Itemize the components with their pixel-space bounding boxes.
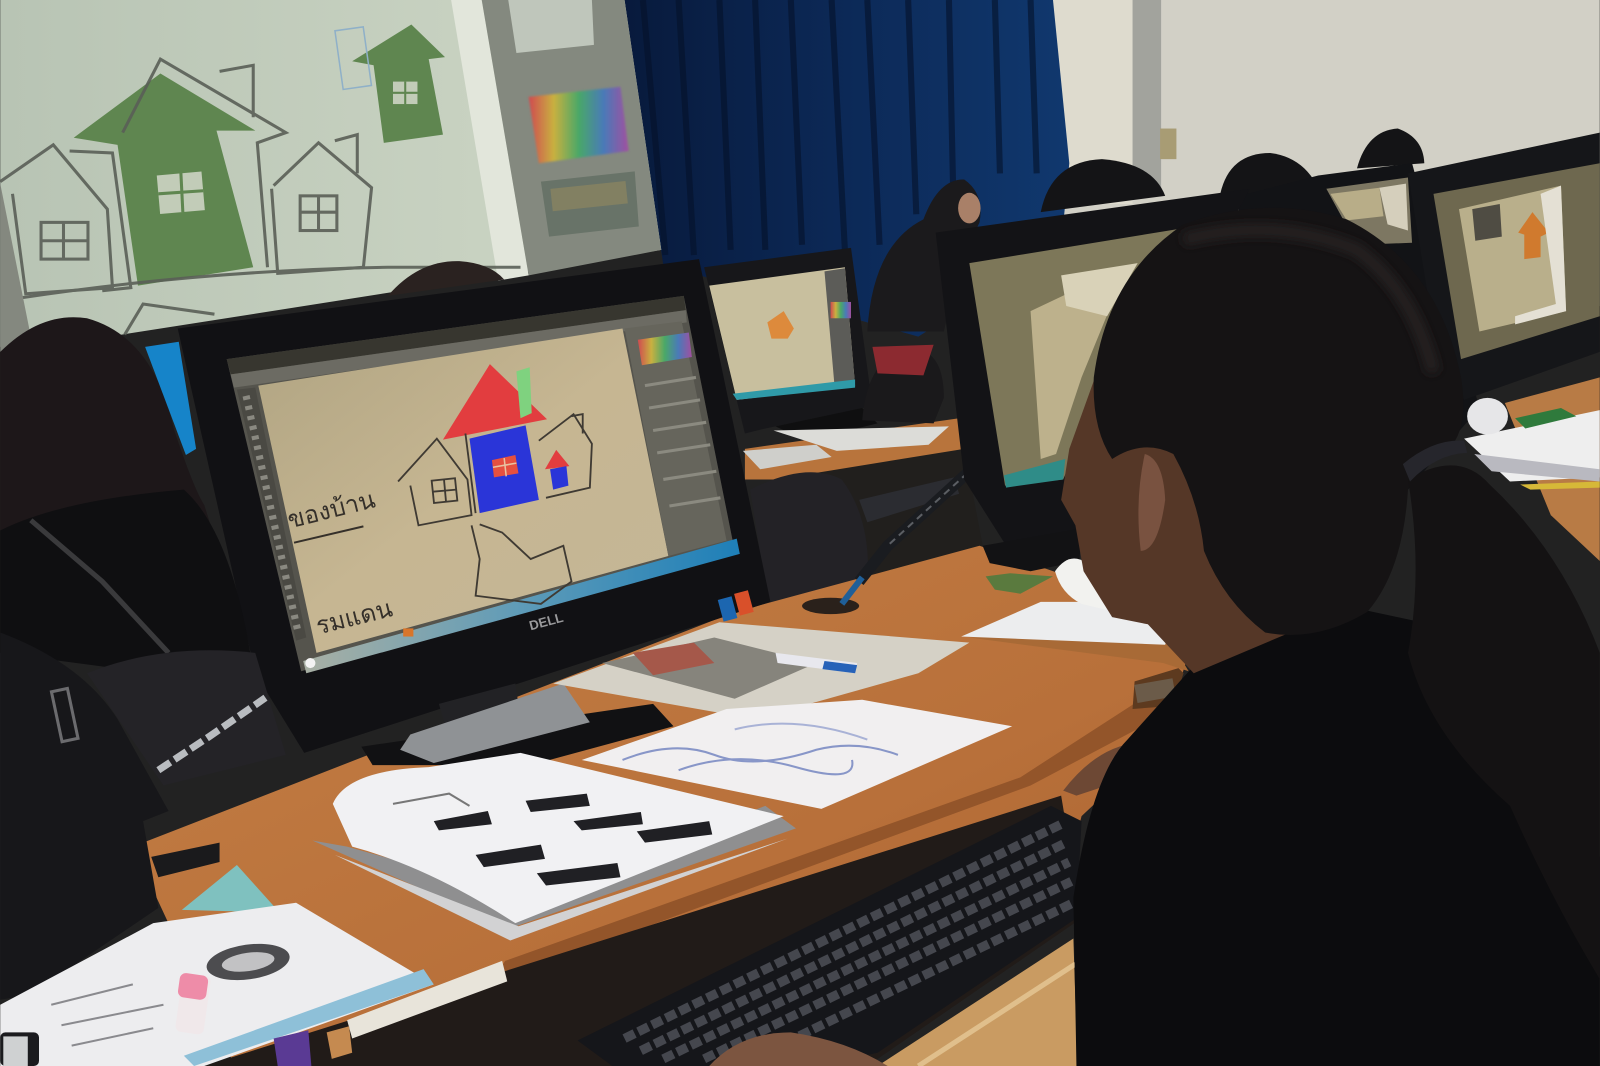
- black office chair behind desk: [750, 472, 868, 617]
- projected green house: [74, 73, 255, 286]
- main woman: face and neck: [1061, 367, 1326, 673]
- projection screen: [0, 0, 661, 349]
- handwriting on screen: ของบ้าน: [285, 486, 378, 534]
- sticker badges: [718, 596, 737, 622]
- pen holder arm: [802, 471, 969, 614]
- right desk papers: [1464, 398, 1600, 490]
- desk edge labels: [274, 961, 507, 1066]
- back row bag and papers: [743, 345, 949, 469]
- right back desk: [1505, 377, 1600, 561]
- paper on the desk with sketch: [582, 700, 1012, 809]
- keyboard: [578, 806, 1082, 1066]
- back student, distant woman: [867, 180, 981, 332]
- projected small green house: [352, 24, 445, 143]
- left chair and bag: [0, 632, 286, 1000]
- transparent folder on desk: [553, 622, 969, 719]
- main left monitor: [178, 259, 770, 753]
- main woman: hair with ponytail: [1094, 208, 1600, 979]
- artboard paper: [258, 328, 668, 653]
- dark wedge at left of screen: [0, 184, 33, 352]
- projected colour picker: [529, 87, 629, 163]
- paper stack lower left with seal: [0, 865, 434, 1066]
- monitor bezel: [178, 259, 770, 753]
- right panel: [625, 321, 727, 556]
- cup and papers near second monitor: [961, 559, 1170, 645]
- back row keyboard: [859, 477, 959, 522]
- hand at keyboard, bottom: [709, 743, 1138, 1066]
- monitor stand: [361, 683, 674, 765]
- projected sketch outlines: [0, 59, 520, 335]
- back row desk and furniture: [745, 418, 985, 602]
- brand label: DELL: [528, 610, 565, 633]
- taskbar: [303, 539, 740, 673]
- back wall: [1051, 0, 1600, 306]
- house drawing: [398, 364, 592, 604]
- blue curtain: [625, 0, 1069, 337]
- heads of back row students: [388, 129, 1424, 296]
- right far monitors: [1224, 133, 1600, 490]
- open worksheet booklet: [312, 753, 796, 941]
- main left monitor: รมแดน: [313, 595, 396, 640]
- middle monitor in the back: [704, 248, 878, 441]
- colour picker: [638, 333, 692, 365]
- lower wooden shelf: [204, 796, 1082, 1066]
- toolbar: [237, 388, 306, 641]
- screen UI frame: [227, 296, 735, 671]
- main woman: shirt: [1073, 602, 1600, 1066]
- second large monitor: [936, 189, 1250, 571]
- woman at left, long dark hair: [0, 317, 250, 673]
- main wooden desk: [133, 546, 1189, 1066]
